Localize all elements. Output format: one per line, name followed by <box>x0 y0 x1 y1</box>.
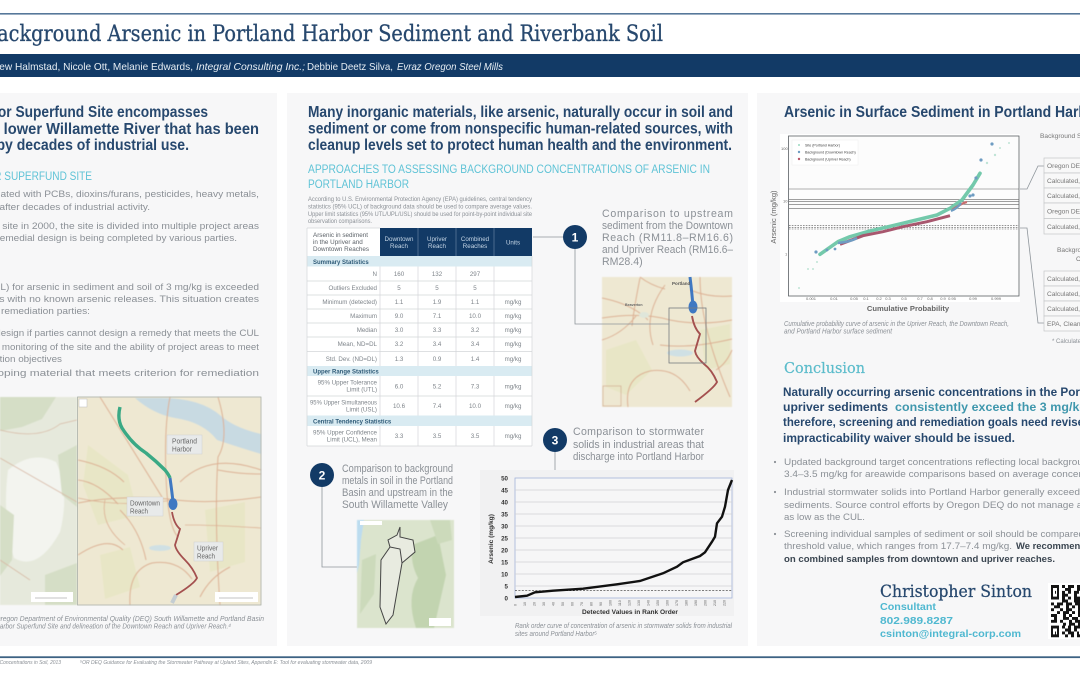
table: arsenic statistics: 3.3 <box>395 433 404 440</box>
heading: naturally occurring materials <box>308 104 733 154</box>
chart: stormwater rank order curve: 5 <box>505 584 509 590</box>
label: Downtown Reach: Reach <box>130 506 148 516</box>
label: Upriver Reach: Reach <box>197 552 215 560</box>
caption: rank order curve <box>515 623 732 638</box>
chart: cumulative probability: Arsenic (mg/kg) <box>769 190 778 244</box>
subheading: approaches: PORTLAND HARBOR <box>308 179 409 191</box>
chart: cumulative probability: 0.05 <box>850 296 859 301</box>
label: Portland Harbor: Portland <box>172 436 197 446</box>
caption: map <box>0 616 264 630</box>
table: arsenic statistics: 5.2 <box>433 384 442 390</box>
table: arsenic statistics: Median <box>357 327 378 334</box>
table: arsenic statistics: Combined <box>461 236 490 243</box>
legend: Background (Downtown Reach) <box>805 150 856 154</box>
icon: number 1: 1 <box>572 230 579 244</box>
contact block: Christopher Sinton <box>880 582 1032 601</box>
table: arsenic statistics: 3.5 <box>471 433 480 440</box>
connector: table to callout 1 to map <box>533 237 669 324</box>
table: arsenic statistics: 5 <box>473 285 477 292</box>
table: arsenic statistics: Upper Range Statistics <box>313 370 379 376</box>
table: arsenic statistics: 132 <box>432 271 443 278</box>
table: arsenic statistics: Std. Dev. (ND=DL) <box>326 356 377 363</box>
chart: stormwater rank order curve: 40 <box>501 500 509 506</box>
label: Portland Harbor: Harbor <box>172 444 192 454</box>
table: arsenic statistics: mg/kg <box>505 327 522 334</box>
table: arsenic statistics: 3.5 <box>433 433 442 440</box>
connector: upper lines to table <box>1020 166 1044 189</box>
chart: cumulative probability: 10 <box>783 198 788 204</box>
chart: stormwater rank order curve: 220 <box>722 600 726 606</box>
caption: cumulative probability <box>784 321 1009 336</box>
map: Portland Harbor reaches <box>0 397 261 605</box>
chart: cumulative probability <box>769 134 1020 313</box>
table: arsenic statistics: 3.3 <box>433 327 442 334</box>
table: arsenic statistics: 1.3 <box>395 356 404 363</box>
chart: cumulative probability: 0.95 <box>948 296 957 301</box>
table: arsenic statistics: mg/kg <box>505 299 522 306</box>
footnotes <box>0 659 372 666</box>
table: arsenic statistics: Reach <box>428 243 446 250</box>
chart: stormwater rank order curve: 80 <box>590 602 594 606</box>
chart: stormwater rank order curve: 50 <box>501 476 509 482</box>
text block: callout 3: Comparison to stormwater <box>573 426 704 438</box>
text block: conclusion statement: impracticability waiver should be issued. <box>783 431 1015 445</box>
text block: EPA guidelines: Upper limit statistics (95% UTL/UPL/USL) should be used for point-by-point individual site <box>308 212 533 218</box>
text block: callout 1: and Upriver Reach (RM16.6– <box>602 244 733 256</box>
legend <box>792 140 858 165</box>
text block: callout 1: sediment from the Downtown <box>602 220 733 232</box>
table: arsenic statistics: 1.4 <box>471 356 480 363</box>
chart: stormwater rank order curve <box>480 470 734 616</box>
table: arsenic statistics: mg/kg <box>505 341 522 348</box>
text block: callout 1: RM28.4) <box>602 256 643 268</box>
chart: cumulative probability: 0.999 <box>991 296 1002 301</box>
chart: stormwater rank order curve: 210 <box>713 600 717 606</box>
chart: stormwater rank order curve: Detected Values in Rank Order <box>582 609 678 616</box>
contact block: Consultant <box>880 602 937 613</box>
table: background sediment values <box>1040 133 1080 234</box>
table: arsenic statistics: mg/kg <box>505 356 522 363</box>
caption: cumulative probability: and Portland Harbor surface sediment <box>784 328 893 336</box>
chart: stormwater rank order curve: 180 <box>684 600 688 606</box>
chart: stormwater rank order curve: 20 <box>532 602 536 606</box>
label: Downtown Reach <box>127 497 163 516</box>
label: Upriver Reach: Upriver <box>197 544 218 552</box>
text block: conclusion bullets: Screening individual samples of sediment or soil should be compared <box>784 529 1080 540</box>
table: arsenic statistics: 5 <box>435 285 439 292</box>
chart: stormwater rank order curve: 20 <box>501 548 509 554</box>
table: arsenic statistics: Downtown Reaches <box>313 246 369 253</box>
text block: callout 3: discharge into Portland Harbor <box>573 451 704 463</box>
table: arsenic statistics: Summary Statistics <box>313 260 369 266</box>
table: arsenic statistics: 7.1 <box>433 313 442 320</box>
icon: number 2: 2 <box>319 468 326 482</box>
connector: callout 2 to map <box>322 487 357 567</box>
table: arsenic statistics: 3.4 <box>471 341 480 348</box>
text block: conclusion bullets: Industrial stormwater solids into Portland Harbor generally exceed <box>784 487 1080 498</box>
heading: conclusion: Conclusion <box>784 361 865 377</box>
table: arsenic statistics: 1.1 <box>395 299 404 306</box>
table: arsenic statistics: mg/kg <box>505 403 522 410</box>
table: background concentrations: Calculated, <box>1047 276 1080 283</box>
label: Portland Harbor <box>167 435 202 454</box>
table: arsenic statistics: 7.3 <box>471 384 480 390</box>
panel: surface sediment and conclusion <box>757 93 1080 646</box>
authors band: Debbie Deetz Silva, <box>307 62 393 73</box>
label: Upriver Reach <box>194 542 223 561</box>
chart: cumulative probability: 0.001 <box>806 296 817 301</box>
table: arsenic statistics: 297 <box>470 271 481 278</box>
connector: dashed lines to table <box>1020 228 1044 323</box>
chart: cumulative probability: 0.01 <box>830 296 839 301</box>
contact block: csinton@integral-corp.com <box>880 629 1021 640</box>
table: arsenic statistics: Minimum (detected) <box>322 299 377 306</box>
contact block <box>880 582 1032 640</box>
chart: cumulative probability: 0.1 <box>863 296 870 301</box>
table: arsenic statistics: Limit (USL) <box>346 406 377 414</box>
table: arsenic statistics: 1.9 <box>433 299 442 306</box>
chart: stormwater rank order curve: 25 <box>501 536 509 542</box>
chart: stormwater rank order curve: 45 <box>501 488 509 494</box>
caption: cumulative probability: Cumulative probability curve of arsenic in the Upriver Reach, the Downtown Reach, <box>784 321 1009 328</box>
table: arsenic statistics: Reaches <box>463 243 487 250</box>
caption: rank order curve: Rank order curve of concentration of arsenic in stormwater solids from industrial <box>515 623 732 630</box>
table: arsenic statistics: Central Tendency Statistics <box>313 420 392 426</box>
table: arsenic statistics: Reach <box>390 243 408 250</box>
text block: conclusion bullets: on combined samples from downtown and upriver reaches. <box>784 554 1055 565</box>
map: upstream comparison: Beaverton <box>625 303 643 307</box>
text block: EPA guidelines: According to U.S. Environmental Protection Agency (EPA) guidelines, central tendency <box>308 197 532 203</box>
chart: stormwater rank order curve: 100 <box>608 600 612 606</box>
text block: conclusion bullets: threshold value, which ranges from 17.7–7.4 mg/kg. <box>784 541 1012 552</box>
table: arsenic statistics: 5 <box>397 285 401 292</box>
text block: callout 1 <box>602 208 733 268</box>
chart: cumulative probability: 0.2 <box>876 296 883 301</box>
text block: callout 2: Comparison to background <box>342 463 453 475</box>
chart: cumulative probability: 100 <box>781 146 788 151</box>
map: Willamette valley <box>357 520 454 628</box>
chart: stormwater rank order curve: 110 <box>618 600 622 606</box>
chart: stormwater rank order curve: 0 <box>505 596 509 602</box>
panel: approaches <box>287 93 748 646</box>
title: Background Arsenic in Portland Harbor Sediment and Riverbank Soil <box>0 22 663 47</box>
text block: conclusion statement: upriver sediments <box>783 400 888 414</box>
text block: callout 3 <box>573 426 704 463</box>
heading: superfund site summary <box>0 104 259 154</box>
table: background concentrations <box>1044 247 1080 345</box>
chart: cumulative probability: 0.9 <box>940 296 947 301</box>
table: arsenic statistics: 9.0 <box>395 313 404 320</box>
legend: Site (Portland Harbor) <box>805 144 840 148</box>
text block: callout 2: Basin and upstream in the <box>342 487 453 499</box>
text block: conclusion statement <box>783 385 1080 445</box>
text block: callout 1: Reach (RM11.8–RM16.6) <box>602 232 733 244</box>
chart: stormwater rank order curve: 170 <box>675 600 679 606</box>
text block: callout 3: solids in industrial areas that <box>573 439 704 451</box>
table: arsenic statistics: mg/kg <box>505 433 522 440</box>
table: arsenic statistics: mg/kg <box>505 384 522 390</box>
table: arsenic statistics: Upriver <box>427 236 447 243</box>
text block: conclusion bullets: as low as the CUL. <box>784 512 865 523</box>
chart: stormwater rank order curve: 140 <box>646 600 650 606</box>
subheading: approaches <box>308 164 710 191</box>
table: arsenic statistics: Units <box>506 240 520 246</box>
caption: rank order curve: sites around Portland Harbor⁵ <box>515 631 597 638</box>
text block: EPA guidelines: observation comparisons. <box>308 219 372 225</box>
table: arsenic statistics: 7.4 <box>433 403 442 410</box>
authors band <box>0 54 1080 77</box>
chart: cumulative probability: 0.5 <box>901 296 908 301</box>
table: arsenic statistics: 3.0 <box>395 327 404 334</box>
chart: stormwater rank order curve: 190 <box>694 600 698 606</box>
chart: stormwater rank order curve: 10 <box>501 572 509 578</box>
contact block: 802.989.8287 <box>880 616 953 627</box>
chart: stormwater rank order curve: 40 <box>552 602 556 606</box>
text block: callout 2 <box>342 463 453 511</box>
chart: stormwater rank order curve: 160 <box>666 600 670 606</box>
table: arsenic statistics: 0.9 <box>433 356 442 363</box>
chart: stormwater rank order curve: 90 <box>599 602 603 606</box>
text block: conclusion bullets <box>774 457 1080 565</box>
footnotes: ⁵OR DEQ Guidance for Evaluating the Stormwater Pathway at Upland Sites, Appendix E: Tool for evaluating stormwater data, 2009 <box>80 659 372 666</box>
table: arsenic statistics: 3.2 <box>395 341 404 348</box>
chart: cumulative probability: 0.8 <box>927 296 934 301</box>
table: arsenic statistics: Limit (UTL) <box>346 386 377 394</box>
table: arsenic statistics: Maximum <box>350 313 377 320</box>
text block: conclusion bullets: Updated background target concentrations reflecting local background <box>784 457 1080 468</box>
text block: EPA guidelines <box>308 197 533 225</box>
table: background concentrations: Calculated, <box>1047 291 1080 298</box>
table: arsenic statistics: 3.2 <box>471 327 480 334</box>
chart: stormwater rank order curve: 200 <box>704 600 708 606</box>
table: arsenic statistics: 95% Upper Tolerance <box>318 380 378 386</box>
legend: Background (Upriver Reach) <box>805 158 851 162</box>
panel: site background <box>0 93 277 646</box>
table: arsenic statistics: in the Upriver and <box>313 239 363 246</box>
chart: stormwater rank order curve: 35 <box>501 512 509 518</box>
table: background sediment values: Calculated, <box>1047 178 1080 185</box>
chart: cumulative probability: 1 <box>785 252 788 256</box>
icon: number 1 <box>563 225 587 249</box>
table: arsenic statistics: 10.0 <box>469 403 482 410</box>
chart: stormwater rank order curve: 120 <box>628 600 632 606</box>
table: arsenic statistics: 10.0 <box>469 313 482 320</box>
text block: callout 2: South Willamette Valley <box>342 499 449 511</box>
table: arsenic statistics: 3.4 <box>433 341 442 348</box>
table: background sediment values: Calculated, <box>1047 224 1080 231</box>
table: arsenic statistics: 160 <box>394 271 405 278</box>
heading: naturally occurring materials: cleanup levels set to protect human health and the environment. <box>308 137 732 154</box>
table: background sediment values: Calculated, <box>1047 193 1080 200</box>
chart: cumulative probability: 0.7 <box>917 296 924 301</box>
text block: site description <box>0 189 259 244</box>
text block: callout 1: Comparison to upstream <box>602 208 733 220</box>
chart: stormwater rank order curve: 0 <box>514 604 518 606</box>
chart: cumulative probability: Cumulative Probability <box>867 304 950 313</box>
chart: stormwater rank order curve: 150 <box>656 600 660 606</box>
chart: stormwater rank order curve: 30 <box>542 602 546 606</box>
heading: naturally occurring materials: Many inorganic materials, like arsenic, naturally occur in soil and <box>308 104 733 121</box>
table: background concentrations: Calculated, <box>1047 306 1080 313</box>
table: arsenic statistics: 10.6 <box>393 403 406 410</box>
chart: stormwater rank order curve: 10 <box>523 602 527 606</box>
table: arsenic statistics: Outliers Excluded <box>328 285 378 292</box>
text block: cleanup level challenge <box>0 282 260 379</box>
table: arsenic statistics: 95% Upper Confidence <box>313 430 378 436</box>
table: arsenic statistics: N <box>373 271 377 278</box>
authors band: Integral Consulting Inc.; <box>196 62 305 73</box>
icon: QR code <box>1048 583 1080 639</box>
chart: cumulative probability: 0.3 <box>885 296 892 301</box>
connector: callout 3 to chart <box>554 452 556 470</box>
table: arsenic statistics: 1.1 <box>471 299 480 306</box>
authors band: Evraz Oregon Steel Mills <box>397 62 503 73</box>
table: arsenic statistics: Downtown <box>385 236 414 243</box>
subheading: approaches: APPROACHES TO ASSESSING BACKGROUND CONCENTRATIONS OF ARSENIC IN <box>308 164 710 176</box>
label: Downtown Reach: Downtown <box>130 498 160 508</box>
table: arsenic statistics: Arsenic in sediment <box>313 232 368 239</box>
table: arsenic statistics: Mean, ND=DL <box>338 341 378 348</box>
icon: number 3 <box>543 428 567 452</box>
chart: stormwater rank order curve: 15 <box>501 560 509 566</box>
icon: number 2 <box>310 463 334 487</box>
table: arsenic statistics <box>307 228 532 446</box>
chart: stormwater rank order curve: 70 <box>580 602 584 606</box>
chart: stormwater rank order curve: 50 <box>561 602 565 606</box>
table: arsenic statistics: mg/kg <box>505 313 522 320</box>
table: arsenic statistics: 95% Upper Simultaneous <box>310 400 377 406</box>
chart: cumulative probability: 0.99 <box>969 296 978 301</box>
table: arsenic statistics: 6.0 <box>395 384 404 390</box>
chart: stormwater rank order curve: 130 <box>637 600 641 606</box>
text block: EPA guidelines: statistics (95% UCL) of background data should be used to compare average values. <box>308 204 532 210</box>
heading: naturally occurring materials: sediment or come from nonspecific human-related sources, with <box>308 120 733 138</box>
text block: callout 2: metals in soil in the Portland <box>342 475 453 487</box>
icon: number 3: 3 <box>552 434 559 448</box>
chart: stormwater rank order curve: 60 <box>570 602 574 606</box>
map: upstream comparison: Portland <box>672 281 691 286</box>
table: arsenic statistics: Limit (UCL), Mean <box>327 436 378 444</box>
chart: stormwater rank order curve: 30 <box>501 524 509 530</box>
map: upstream comparison <box>602 277 732 407</box>
chart: stormwater rank order curve: Arsenic (mg/kg) <box>488 514 495 564</box>
